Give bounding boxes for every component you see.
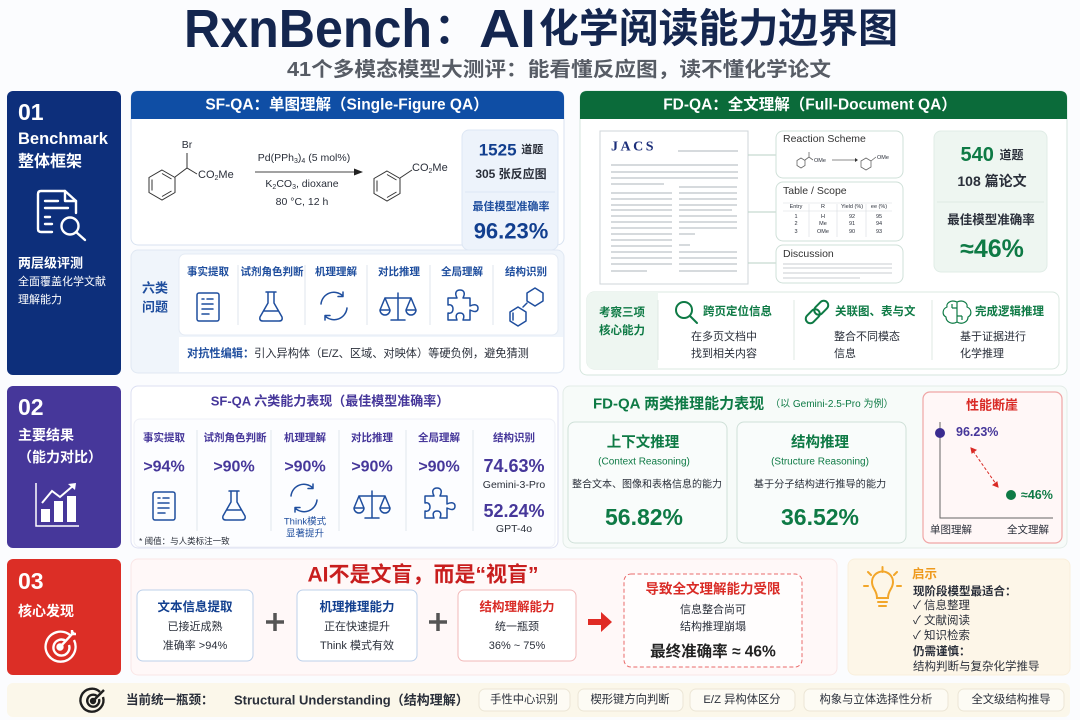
panel: section 01 benchmark: [7, 91, 121, 375]
panel: section 01 benchmark: 理解能力: [18, 292, 62, 306]
panel: SF-QA six abilities results: [131, 386, 558, 548]
table scope card: ee (%): [871, 204, 887, 210]
panel: FD-QA full document: FD-QA：全文理解（Full-Document QA）: [663, 94, 957, 114]
title: RxnBench: [184, 0, 432, 59]
type: fact extraction: 事实提取: [187, 265, 229, 278]
ability: link figures tables text: 信息: [834, 346, 856, 360]
result: fact extraction: >94%: [143, 458, 185, 476]
type: mechanism: [315, 265, 357, 320]
panel: SF-QA six abilities results: SF-QA 六类能力表现（最佳模型准确率）: [211, 394, 449, 408]
table scope card: H: [821, 214, 825, 220]
card: context reasoning: (Context Reasoning): [598, 456, 690, 468]
panel: six question types: 问题: [142, 300, 168, 314]
tag: E/Z 异构体区分: [703, 692, 781, 706]
card: structure reasoning: 结构推理: [791, 433, 849, 451]
ability: locate across pages: [676, 302, 772, 360]
plus sign: [266, 613, 284, 631]
panel: performance cliff chart: 性能断崖: [966, 398, 1018, 412]
title: [184, 0, 898, 59]
tag: [479, 689, 570, 711]
icon: growth chart: [36, 483, 79, 526]
SF stats box: 最佳模型准确率: [472, 199, 550, 213]
panel: SF-QA single figure: [131, 91, 564, 250]
title: ：: [434, 6, 476, 52]
panel: section 03 core findings: 核心发现: [18, 603, 74, 619]
card: text extraction: [137, 590, 253, 661]
reaction scheme card: [776, 131, 903, 178]
SF stats box: [462, 130, 558, 250]
chemical reaction scheme: K: [265, 178, 272, 190]
panel: SF-QA single figure: SF-QA：单图理解（Single-Figure QA）: [205, 96, 489, 114]
ability: locate across pages: 找到相关内容: [691, 346, 757, 360]
core abilities panel: 考察三项: [599, 305, 645, 319]
card: mechanism reasoning: [297, 590, 417, 661]
card: mechanism reasoning: 机理推理能力: [319, 599, 395, 614]
bottom bar: structural bottleneck: [7, 683, 1070, 717]
type: comparative reasoning: 对比推理: [378, 265, 420, 278]
table scope card: 91: [849, 221, 855, 227]
title: AI: [479, 0, 536, 59]
panel: performance cliff chart: 96.23%: [956, 425, 998, 439]
result: reagent role: [204, 431, 267, 520]
card: text extraction: 已接近成熟: [168, 619, 222, 633]
result: mechanism: >90%: [284, 458, 326, 476]
chemical reaction scheme: ): [298, 152, 301, 164]
reaction scheme card: Reaction Scheme: [783, 133, 866, 145]
panel: six question types: 六类: [142, 280, 168, 296]
table scope card: 94: [876, 221, 882, 227]
result box: 信息整合尚可: [680, 602, 746, 616]
chemical reaction scheme: 4: [301, 158, 305, 164]
panel: insight: 现阶段模型最适合：: [913, 584, 1016, 598]
table scope card: 93: [876, 229, 882, 235]
result: mechanism: Think模式: [284, 516, 327, 528]
chemical reaction scheme: 3: [294, 158, 298, 164]
panel: section 03 core findings: [7, 559, 121, 675]
chemical reaction scheme: (5 mol%): [305, 152, 350, 164]
tag: 楔形键方向判断: [590, 692, 670, 706]
result: mechanism: 机理理解: [284, 431, 326, 444]
panel: FD-QA two reasoning types: FD-QA 两类推理能力表现 （以 Gemini-2.5-Pro 为例）: [593, 394, 893, 412]
FD stats box: ≈46%: [960, 235, 1024, 263]
tag: [958, 689, 1064, 711]
result: comparison: >90%: [351, 458, 393, 476]
panel: insight: 启示: [912, 566, 937, 581]
panel: insight: 仍需谨慎：: [913, 644, 970, 658]
adversarial editing note: 对抗性编辑：引入异构体（E/Z、区域、对映体）等硬负例，避免猜测: [187, 346, 529, 360]
FD stats box: [934, 131, 1047, 272]
result: reagent role: >90%: [213, 458, 255, 476]
chemical reaction scheme: 80 °C, 12 h: [276, 196, 328, 208]
panel: section 01 benchmark: 01: [18, 99, 44, 125]
result: mechanism: 显著提升: [286, 528, 324, 540]
bottom bar: structural bottleneck: Structural Understanding（结构理解）: [234, 692, 469, 708]
type: reagent role: [240, 265, 304, 321]
result box: 结构推理崩塌: [680, 619, 746, 633]
panel: section 01 benchmark: 整体框架: [18, 152, 82, 170]
chemical reaction scheme: 2: [214, 174, 218, 182]
panel: insight: ✓ 文献阅读: [913, 613, 971, 627]
panel: six question types: [131, 250, 564, 373]
panel: core finding flow: [131, 559, 837, 675]
ability: link figures tables text: [804, 299, 916, 360]
card: text extraction: 文本信息提取: [157, 599, 233, 614]
type: structure recognition: 结构识别: [505, 265, 547, 278]
table scope card: Table / Scope: [783, 185, 847, 197]
FD stats box: 最佳模型准确率: [947, 212, 1035, 227]
panel: section 02 main results: 02: [18, 394, 44, 420]
icon: target: [80, 689, 104, 712]
SF stats box: 96.23%: [474, 218, 548, 244]
reaction scheme card: OMe: [877, 155, 889, 161]
result: structure recognition: 结构识别: [493, 431, 535, 444]
result: fact extraction: 事实提取: [143, 431, 185, 444]
chemical reaction scheme: Me: [432, 162, 448, 174]
discussion card: Discussion: [783, 248, 834, 260]
tag: 全文级结构推导: [971, 692, 1051, 706]
card: mechanism reasoning: Think 模式有效: [320, 638, 394, 652]
result: comparison: 对比推理: [351, 431, 393, 444]
FD stats box: 540 道题: [961, 144, 1023, 166]
table scope card: OMe: [817, 229, 829, 235]
result: global: [418, 431, 460, 518]
footnote: * 阈值：与人类标注一致: [139, 536, 230, 546]
table scope card: R: [821, 204, 825, 210]
chemical reaction scheme: 2: [428, 168, 432, 174]
type: mechanism: 机理理解: [315, 265, 357, 278]
panel: section 01 benchmark: 全面覆盖化学文献: [18, 274, 106, 288]
panel: performance cliff chart: ≈46%: [1021, 488, 1053, 502]
result box: 导致全文理解能力受限: [646, 580, 781, 596]
panel: FD-QA full document: [580, 91, 1067, 375]
ability: link figures tables text: 整合不同模态: [834, 329, 900, 343]
JACS paper page: [600, 131, 748, 284]
ability: locate across pages: 在多页文档中: [691, 329, 757, 343]
result: mechanism: [284, 431, 327, 540]
card: structure understanding: [458, 590, 576, 661]
result: reagent role: 试剂角色判断: [204, 431, 267, 444]
card: structure understanding: 结构理解能力: [479, 599, 555, 614]
result: structure recognition: 74.63%: [483, 456, 545, 476]
panel: performance cliff chart: [923, 392, 1062, 543]
SF stats box: 1525 道题: [479, 140, 543, 160]
discussion card: [776, 245, 903, 283]
plus sign: [429, 613, 447, 631]
tag: 构象与立体选择性分析: [820, 692, 932, 706]
panel: section 01 benchmark: Benchmark: [18, 130, 109, 148]
chemical reaction scheme: CO: [412, 162, 428, 174]
result: structure recognition: 52.24%: [483, 501, 545, 521]
card: context reasoning: 56.82%: [605, 504, 683, 530]
panel: performance cliff chart: 单图理解: [930, 523, 972, 536]
card: mechanism reasoning: 正在快速提升: [324, 620, 390, 633]
panel: section 01 benchmark: 两层级评测: [18, 256, 83, 270]
table scope card: 3: [794, 229, 798, 235]
panel: core finding flow: AI不是文盲，而是“视盲”: [308, 562, 538, 586]
ability: logical reasoning: 化学推理: [960, 346, 1004, 360]
table scope card: 2: [794, 221, 798, 227]
panel: section 02 main results: [7, 386, 121, 548]
card: text extraction: 准确率 >94%: [163, 638, 227, 652]
panel: insight: ✓ 信息整理: [913, 598, 971, 612]
table scope card: Me: [819, 221, 827, 227]
chemical reaction scheme: Me: [218, 169, 234, 181]
type: fact extraction: [187, 265, 229, 321]
table scope card: [776, 182, 903, 241]
type: reagent role: 试剂角色判断: [240, 265, 304, 278]
tag: [690, 689, 795, 711]
panel: performance cliff chart: 全文理解: [1007, 523, 1049, 536]
core abilities panel: 核心能力: [599, 323, 645, 337]
subtitle: 41个多模态模型大测评：能看懂反应图，读不懂化学论文: [287, 57, 831, 81]
icon: target: [46, 630, 76, 662]
chemical reaction scheme: , dioxane: [296, 178, 339, 190]
card: structure reasoning: 基于分子结构进行推导的能力: [754, 478, 886, 490]
card: structure understanding: 统一瓶颈: [495, 619, 539, 633]
table scope card: 90: [849, 229, 855, 235]
card: structure reasoning: [737, 422, 906, 543]
panel: insight: [848, 559, 1070, 675]
result box: 最终准确率 ≈ 46%: [650, 642, 776, 660]
ability: locate across pages: 跨页定位信息: [703, 304, 772, 318]
tag: [578, 689, 683, 711]
result: structure recognition: GPT-4o: [496, 523, 532, 535]
type: global understanding: [441, 265, 483, 320]
result: global: 全局理解: [418, 431, 460, 444]
card: structure reasoning: (Structure Reasoning): [771, 456, 869, 468]
card: structure reasoning: 36.52%: [781, 504, 859, 530]
result: comparison: [351, 431, 393, 518]
card: context reasoning: [568, 422, 727, 543]
ability: logical reasoning: 基于证据进行: [960, 329, 1026, 343]
JACS paper page: JACS: [611, 140, 656, 154]
chemical reaction scheme: 3: [292, 184, 296, 190]
panel: FD-QA two reasoning types: [563, 386, 1067, 548]
reaction scheme card: OMe: [814, 158, 826, 164]
type: global understanding: 全局理解: [441, 265, 483, 278]
chemical reaction scheme: [149, 139, 448, 208]
icon: light bulb: [864, 567, 901, 606]
result: global: >90%: [418, 458, 460, 476]
card: context reasoning: 整合文本、图像和表格信息的能力: [572, 478, 722, 490]
table scope card: 92: [849, 214, 855, 220]
chemical reaction scheme: Pd(PPh: [258, 152, 294, 164]
table scope card: Entry: [790, 204, 803, 210]
result: fact extraction: [143, 431, 185, 520]
arrow: [588, 612, 612, 632]
SF stats box: 305 张反应图: [475, 166, 547, 181]
chemical reaction scheme: CO: [276, 178, 292, 190]
card: structure understanding: 36% ~ 75%: [489, 640, 545, 652]
table scope card: 1: [794, 214, 798, 220]
result: structure recognition: Gemini-3-Pro: [483, 479, 545, 491]
ability: link figures tables text: 关联图、表与文: [835, 304, 916, 318]
FD stats box: 108 篇论文: [957, 173, 1027, 189]
ability: logical reasoning: [943, 301, 1044, 360]
type: comparative reasoning: [378, 265, 420, 320]
type: structure recognition: [505, 265, 547, 326]
chemical reaction scheme: CO: [198, 169, 214, 181]
tag: 手性中心识别: [490, 692, 558, 706]
result box: [624, 574, 802, 667]
card: context reasoning: 上下文推理: [607, 433, 680, 451]
chemical reaction scheme: 2: [272, 184, 276, 190]
panel: insight: 结构判断与复杂化学推导: [913, 659, 1040, 673]
chemical reaction scheme: Br: [182, 139, 193, 151]
panel: section 02 main results: （能力对比）: [18, 449, 102, 465]
panel: section 02 main results: 主要结果: [18, 427, 74, 443]
table scope card: 95: [876, 214, 882, 220]
panel: section 03 core findings: 03: [18, 568, 44, 594]
ability: logical reasoning: 完成逻辑推理: [975, 304, 1044, 318]
title: 化学阅读能力边界图: [539, 7, 898, 51]
core abilities panel: [587, 292, 1059, 369]
icon: document search: [38, 191, 85, 240]
panel: insight: ✓ 知识检索: [913, 628, 970, 642]
result: structure recognition: [483, 431, 545, 535]
bottom bar: structural bottleneck: 当前统一瓶颈：: [126, 692, 214, 707]
tag: [804, 689, 948, 711]
table scope card: Yield (%): [841, 204, 863, 210]
